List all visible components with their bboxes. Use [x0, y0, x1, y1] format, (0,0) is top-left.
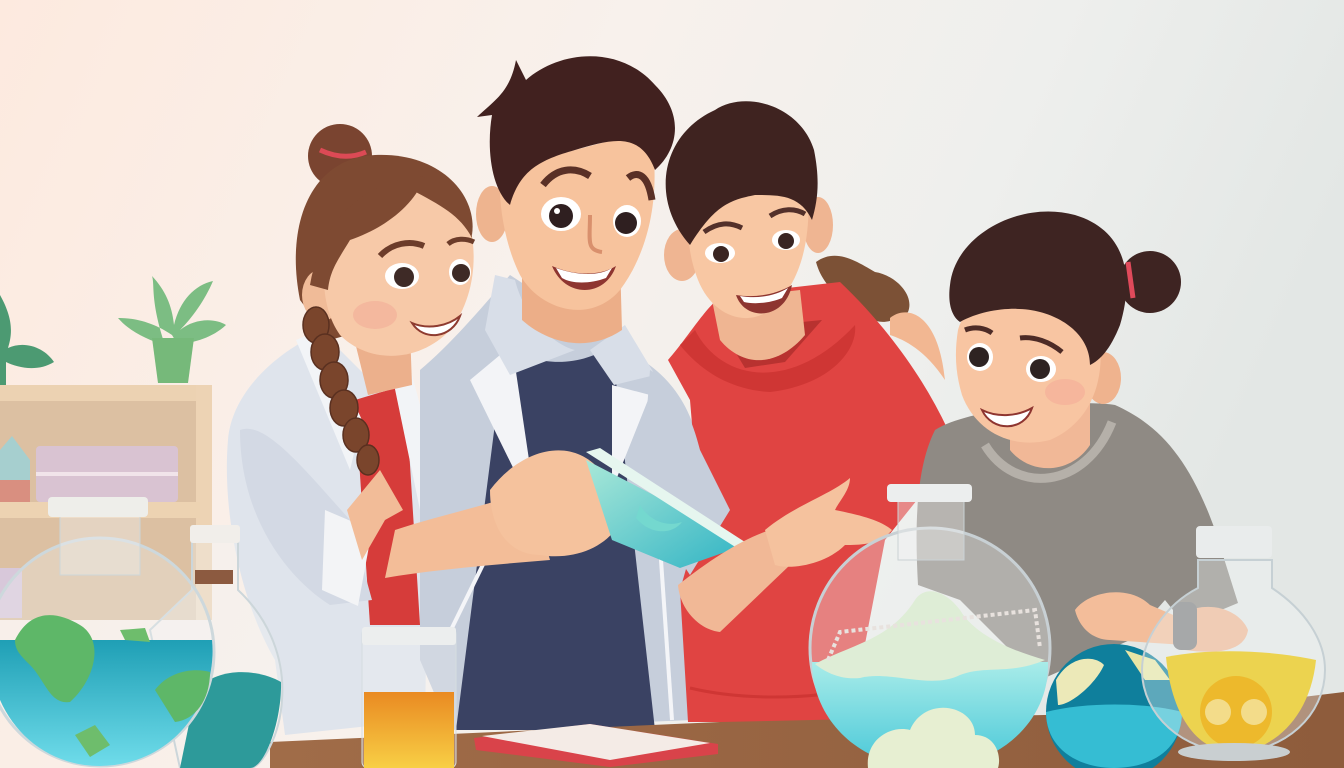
card: teal booklet: [586, 448, 748, 568]
flask: foam mountain: [810, 484, 1050, 768]
notebook: [474, 724, 718, 767]
red hoodie boy: head: [664, 101, 833, 360]
flask: earth globe: [0, 497, 214, 766]
right child: body: [917, 395, 1248, 680]
brown hair tuft behind shoulder: [816, 256, 909, 322]
plant: left edge: [0, 295, 54, 415]
flask: yellow liquid: [1142, 526, 1325, 761]
plant: potted on shelf: [118, 276, 226, 383]
bookshelf: [0, 385, 212, 620]
flask: small earth sphere: [1046, 644, 1182, 768]
red hoodie boy: body: [668, 282, 948, 722]
table: [270, 692, 1344, 768]
right child: head: [949, 211, 1181, 443]
arms holding card: [347, 450, 626, 578]
flask: green-teal back flask: [150, 525, 282, 768]
girl: back hair and bun: [296, 124, 473, 340]
arm pointing: [678, 478, 892, 632]
center boy: body: [420, 275, 730, 730]
beaker: orange liquid jar: [362, 627, 456, 768]
girl: braid: [303, 307, 379, 475]
girl: lab coat: [227, 330, 430, 735]
center boy: head: [476, 56, 675, 343]
girl: neck and head: [302, 176, 474, 395]
center boy: right sleeve in front of hoodie: [640, 370, 730, 575]
